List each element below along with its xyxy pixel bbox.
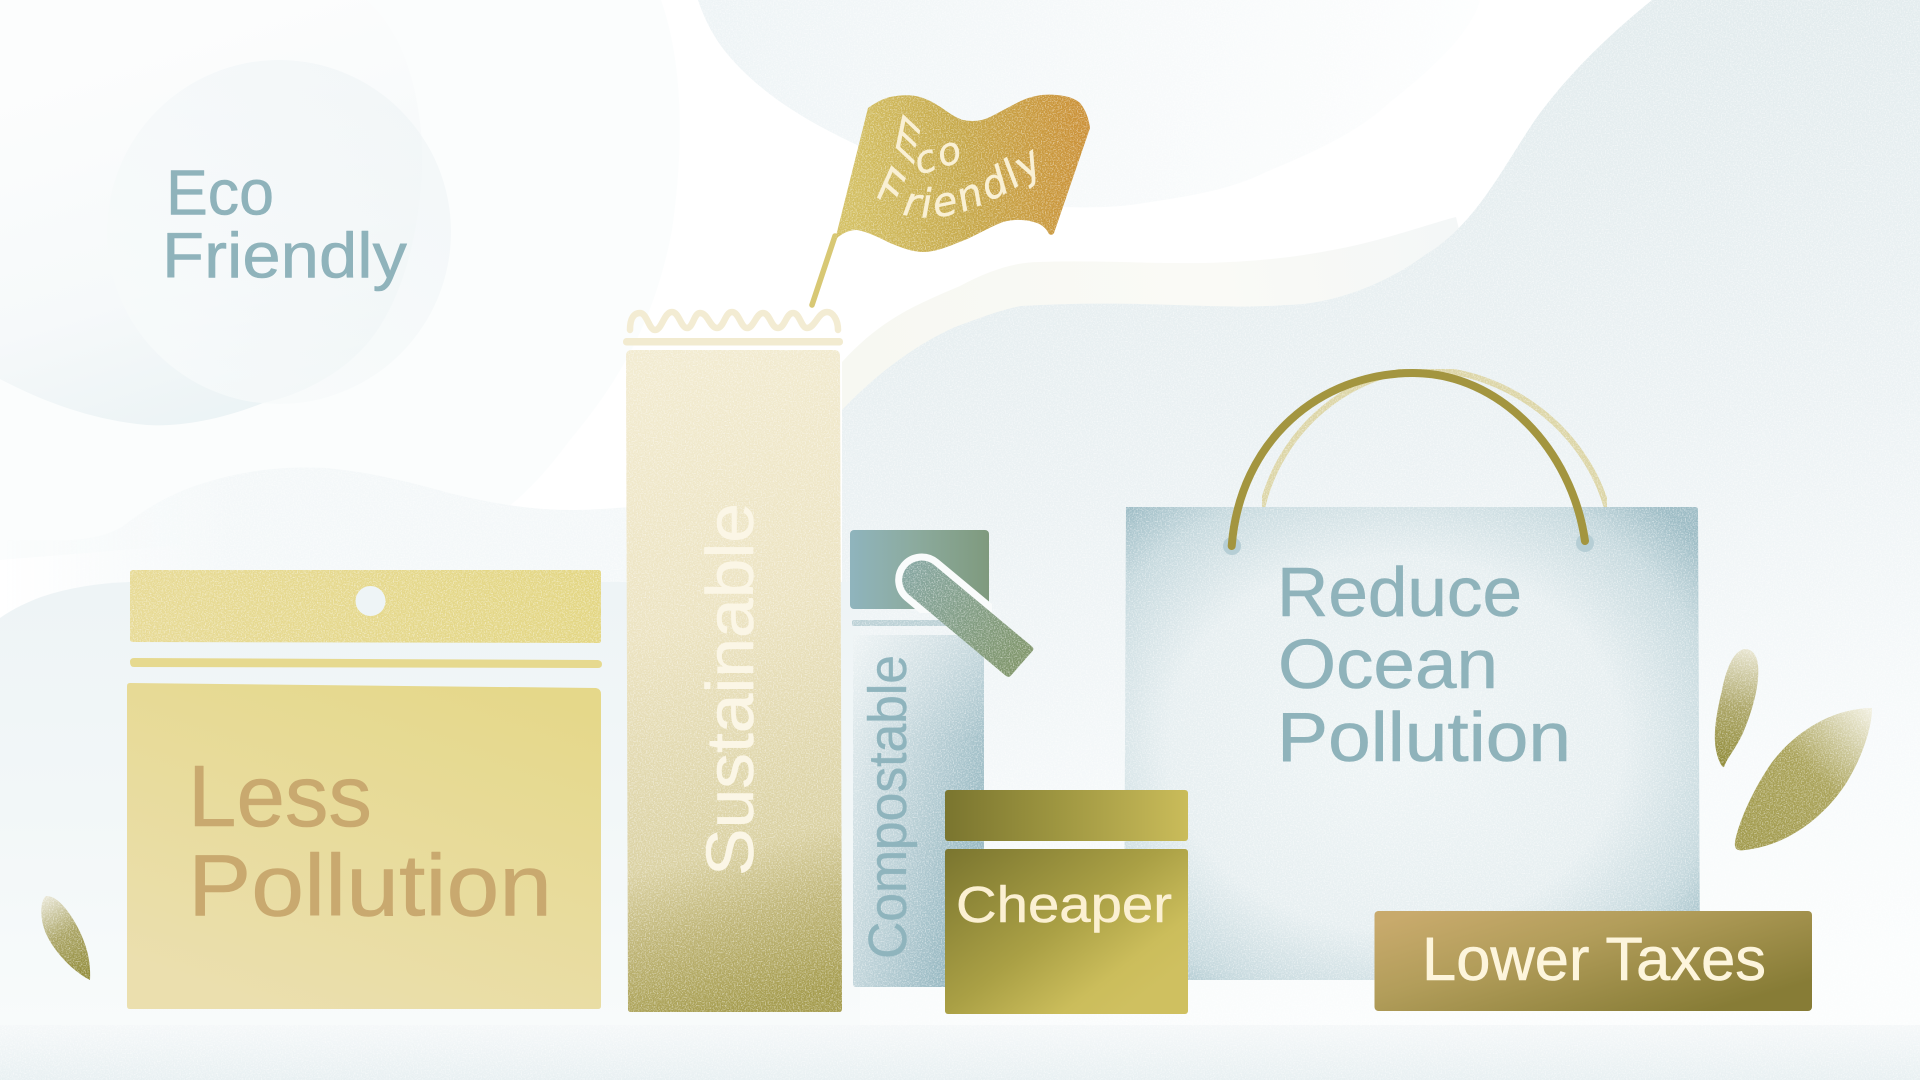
leaf: upper bbox=[1715, 649, 1758, 767]
label: Compostable: Compostable bbox=[858, 655, 918, 959]
crimped top squiggle bbox=[630, 312, 838, 330]
bag top strip with hole bbox=[130, 570, 601, 643]
package: Less Pollution zip bag bbox=[127, 570, 602, 1009]
bag body bbox=[1124, 507, 1700, 980]
leaves: right bbox=[1715, 649, 1872, 850]
flag text: F bbox=[871, 153, 911, 221]
seal line bbox=[852, 620, 962, 626]
crimp band bbox=[623, 338, 843, 346]
label: Reduce Ocean Pollution bbox=[1277, 553, 1571, 776]
label: Reduce Ocean Pollution: Reduce bbox=[1277, 553, 1522, 631]
box lid bbox=[945, 790, 1188, 841]
leaf: lower bbox=[1735, 708, 1872, 850]
back handle bbox=[1262, 369, 1607, 508]
bag body bbox=[127, 683, 601, 1009]
flag text: E bbox=[891, 102, 924, 177]
label: Less Pollution: Pollution bbox=[188, 838, 552, 934]
floor band bbox=[0, 1025, 1920, 1080]
package: Compostable pouch bbox=[850, 530, 1034, 987]
lid tab bbox=[902, 560, 1033, 677]
label: Reduce Ocean Pollution: Pollution bbox=[1277, 698, 1571, 776]
heading: Eco Friendly bbox=[162, 156, 407, 292]
package: Lower Taxes box bbox=[1374, 911, 1812, 1011]
flag cloth bbox=[835, 95, 1090, 252]
label: Reduce Ocean Pollution: Ocean bbox=[1278, 625, 1498, 703]
package: Reduce Ocean Pollution shopping bag bbox=[1124, 369, 1700, 980]
leaf: left bbox=[41, 896, 90, 980]
flag pole bbox=[812, 236, 835, 305]
grommets bbox=[1223, 534, 1594, 555]
heading: Eco Friendly: Friendly bbox=[162, 220, 407, 292]
front handle bbox=[1232, 373, 1585, 546]
pouch lid bbox=[850, 530, 989, 609]
flag text: riendly bbox=[903, 149, 1036, 218]
heading: Eco Friendly: Eco bbox=[166, 156, 274, 228]
label: Less Pollution: Less bbox=[188, 748, 372, 845]
package: Cheaper box bbox=[945, 790, 1188, 1014]
lid tab halo bbox=[895, 554, 992, 613]
flag text: co bbox=[908, 126, 969, 184]
label: Sustainable: Sustainable bbox=[693, 503, 768, 876]
flag text bbox=[871, 102, 1036, 221]
flag: Eco Friendly bbox=[809, 94, 1090, 308]
label: Cheaper: Cheaper bbox=[956, 876, 1172, 933]
tube body bbox=[626, 350, 842, 1012]
label: Less Pollution bbox=[188, 748, 552, 934]
zip line bbox=[130, 658, 602, 668]
package: Sustainable tube bbox=[623, 312, 843, 1012]
pouch body bbox=[853, 635, 984, 987]
label: Lower Taxes: Lower Taxes bbox=[1422, 925, 1766, 993]
box base bbox=[945, 849, 1188, 1014]
